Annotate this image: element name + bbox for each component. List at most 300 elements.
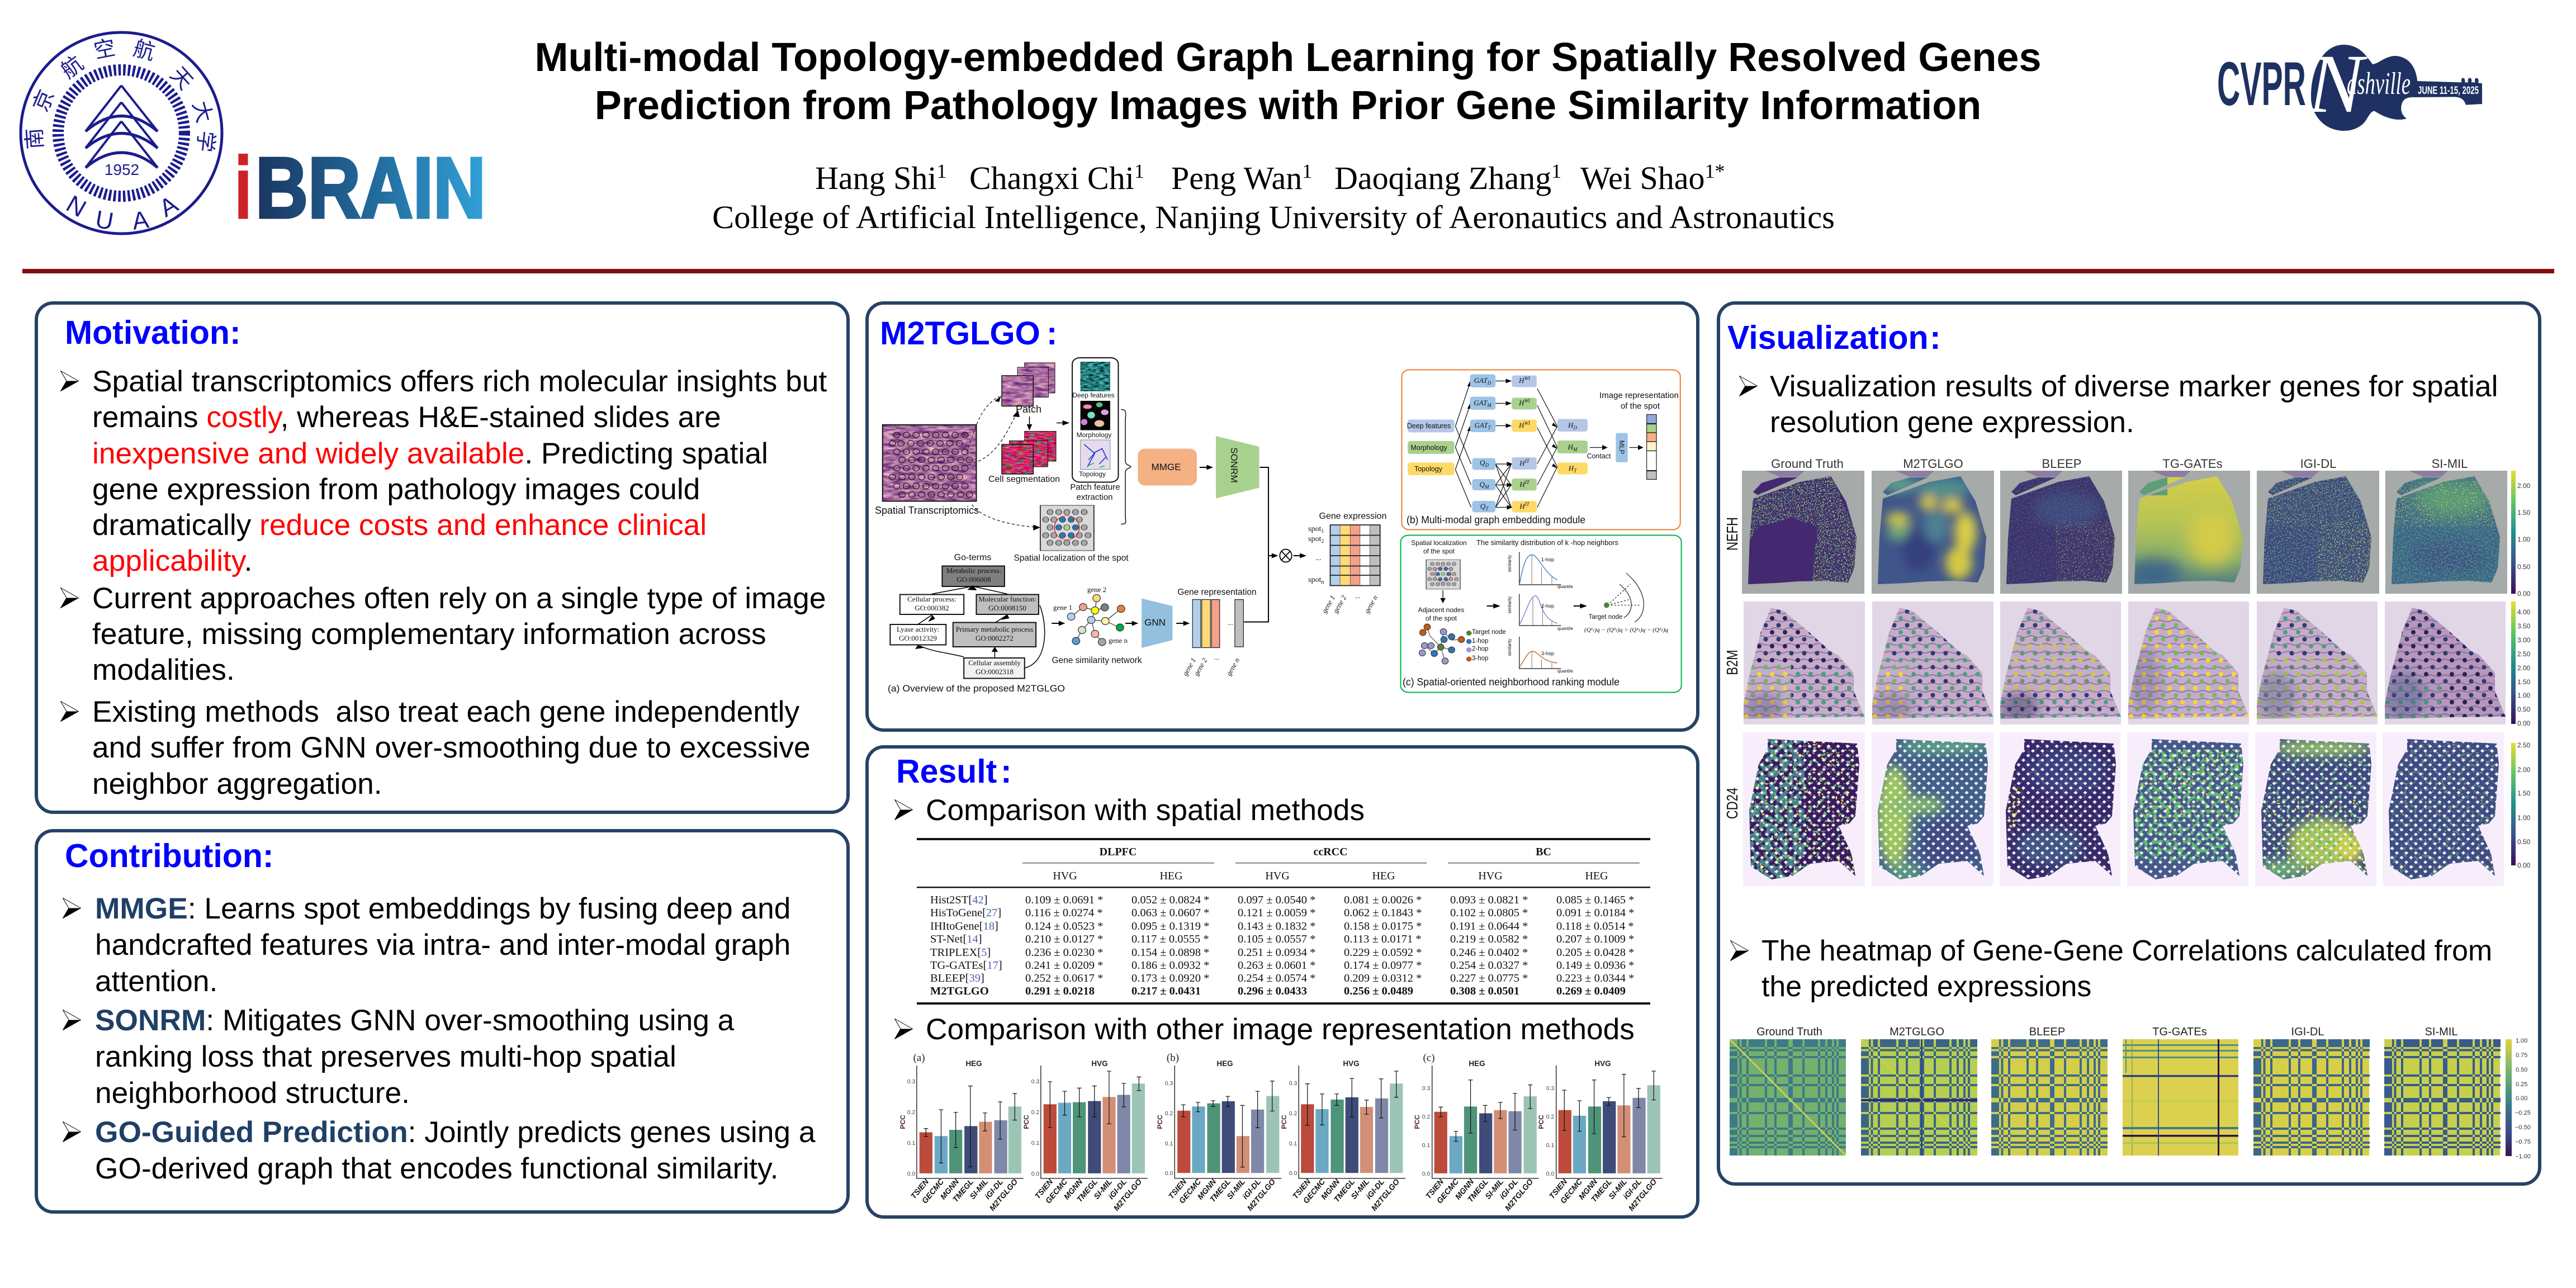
panel: M2TGLGO: spot bbox=[1308, 535, 1321, 543]
diagram labels: MLP bbox=[1618, 441, 1626, 454]
x axis method labels: SI-MIL bbox=[1349, 1177, 1371, 1201]
table: spatial method comparison: 0.308 ± 0.0501 bbox=[1450, 985, 1519, 997]
dashed arrows bbox=[964, 396, 1040, 528]
table: spatial method comparison: IHItoGene[18] bbox=[930, 920, 998, 932]
text block: Motivation bullets: neighbor aggregation. bbox=[92, 768, 382, 801]
chart titles and panel letters bbox=[965, 1059, 1611, 1068]
bar charts: PCC comparison: 0.2 bbox=[1422, 1114, 1430, 1120]
table: spatial method comparison: 0.223 ± 0.0344 * bbox=[1556, 972, 1634, 984]
x axis method labels: GECMC bbox=[1044, 1177, 1069, 1205]
panel: Motivation bbox=[36, 303, 848, 812]
panel: Contribution bbox=[36, 831, 848, 1212]
module b: boxes bbox=[1408, 375, 1628, 512]
text block: Contribution bullets: SONRM: Mitigates GNN over-smoothing using a bbox=[95, 1004, 735, 1037]
image: spatial transcriptomics slide bbox=[883, 425, 976, 501]
bar charts: PCC comparison: 0.2 bbox=[907, 1109, 915, 1116]
bar charts: PCC comparison: (a) bbox=[913, 1052, 925, 1064]
column titles: spatial maps: M2TGLGO bbox=[1903, 457, 1963, 471]
panel: M2TGLGO: Lyase activity: bbox=[897, 625, 939, 633]
diagram labels: 1-hop bbox=[1541, 557, 1554, 562]
logo: CVPR Nashville: CVPR bbox=[2217, 50, 2306, 119]
module b: image representation column bbox=[1647, 415, 1656, 480]
y axis labels: PCC bbox=[1156, 1115, 1164, 1129]
row of maps: CD24 bbox=[1743, 732, 2531, 886]
table: spatial method comparison: TG-GATEs[17] bbox=[930, 959, 1002, 972]
diagram labels: extraction bbox=[1076, 493, 1113, 502]
diagram labels: Spatial localization of the spot bbox=[1014, 553, 1129, 563]
text: heatmap description: the predicted expressions bbox=[1761, 970, 2091, 1002]
chart titles and panel letters: HVG bbox=[1343, 1059, 1360, 1068]
authors bbox=[815, 160, 1725, 196]
colorbar: CD24: 0.00 bbox=[2517, 861, 2531, 869]
map: B2M M2TGLGO bbox=[1872, 602, 1993, 724]
x axis method labels: M2TGLGO bbox=[1370, 1177, 1401, 1213]
diagram labels: (b) Multi-modal graph embedding module bbox=[1407, 514, 1585, 525]
map: NEFH SI-MIL bbox=[2385, 471, 2507, 594]
bar charts: PCC comparison: 0.2 bbox=[1546, 1114, 1554, 1120]
panel: M2TGLGO: gene 2 bbox=[1087, 585, 1106, 594]
table: spatial method comparison: 0.109 ± 0.0691 * bbox=[1025, 894, 1103, 906]
x axis method labels: TMEGL bbox=[1208, 1177, 1232, 1204]
x axis method labels: TSIEN bbox=[1167, 1177, 1188, 1201]
table: spatial method comparison: 0.091 ± 0.0184 * bbox=[1556, 907, 1634, 919]
panel: M2TGLGO: Molecular function: bbox=[978, 595, 1036, 603]
chart titles and panel letters: HVG bbox=[1091, 1059, 1108, 1068]
table: spatial method comparison: 0.186 ± 0.0932 * bbox=[1131, 959, 1209, 972]
diagram shapes bbox=[883, 358, 1682, 692]
table: spatial method comparison: 0.085 ± 0.1465 * bbox=[1556, 894, 1634, 906]
logo: NUAA university seal: 大 bbox=[188, 98, 216, 125]
panel: M2TGLGO: GAT bbox=[1474, 399, 1487, 407]
x axis method labels: MGNN bbox=[1062, 1177, 1085, 1201]
panel: M2TGLGO: GO:0012329 bbox=[899, 634, 937, 642]
bar charts: PCC comparison: (c) bbox=[1423, 1052, 1435, 1064]
x axis method labels: SI-MIL bbox=[968, 1177, 989, 1201]
table: spatial method comparison: ccRCC bbox=[1313, 846, 1348, 858]
panel: M2TGLGO: D bbox=[1484, 462, 1489, 468]
logo: NUAA university seal: 空 bbox=[92, 36, 117, 63]
x axis method labels: TSIEN bbox=[909, 1177, 931, 1201]
table: spatial method comparison: 0.113 ± 0.0171 * bbox=[1344, 933, 1422, 945]
diagram labels: Morphology bbox=[1410, 444, 1447, 452]
logo: iBRAIN: i bbox=[235, 140, 251, 236]
bar charts: PCC comparison: 0.1 bbox=[907, 1140, 915, 1147]
y axis labels: PCC bbox=[1280, 1115, 1288, 1129]
table: spatial method comparison: 0.210 ± 0.0127 * bbox=[1025, 933, 1103, 945]
logo: CVPR Nashville: N bbox=[2307, 37, 2367, 130]
text block: Motivation bullets: dramatically reduce costs and enhance clinical bbox=[92, 509, 707, 542]
table: spatial method comparison: BLEEP[39] bbox=[930, 972, 984, 984]
text block: Motivation bullets: Spatial transcriptomics offers rich molecular insights but bbox=[92, 365, 827, 398]
colorbar: CD24: 2.00 bbox=[2517, 766, 2531, 774]
column titles: spatial maps: TG-GATEs bbox=[2162, 457, 2223, 471]
diagram labels: 3-hop bbox=[1541, 651, 1554, 656]
colorbar: heatmap: −0.50 bbox=[2515, 1124, 2531, 1131]
logo: NUAA university seal: 南 bbox=[23, 127, 48, 150]
text block: Contribution bullets: GO-Guided Prediction: Jointly predicts genes using a bbox=[95, 1116, 816, 1149]
y axis labels: PCC bbox=[1413, 1115, 1421, 1129]
chart a HVG bars bbox=[1041, 1066, 1148, 1178]
panel: Result bbox=[867, 747, 1698, 1217]
x axis method labels: TSIEN bbox=[1291, 1177, 1313, 1201]
panel: M2TGLGO: gene 1 bbox=[1320, 594, 1337, 614]
heading: Motivation: Motivation: bbox=[65, 314, 241, 351]
panel: M2TGLGO: Q bbox=[1480, 502, 1485, 510]
panel: M2TGLGO: H bbox=[1568, 421, 1573, 429]
x axis method labels: SI-MIL bbox=[1483, 1177, 1505, 1201]
logo: iBRAIN: BRAIN bbox=[255, 140, 486, 236]
table: spatial method comparison: 0.149 ± 0.0936 * bbox=[1556, 959, 1634, 972]
column titles: spatial maps bbox=[1771, 457, 2468, 471]
logo: NUAA university seal: 航 bbox=[131, 37, 158, 65]
heatmap: M2TGLGO bbox=[1861, 1039, 1977, 1156]
panel: M2TGLGO: H bbox=[1519, 502, 1525, 510]
table: spatial method comparison: 0.191 ± 0.0644 * bbox=[1450, 920, 1528, 932]
panel: M2TGLGO: gene n bbox=[1362, 594, 1379, 614]
table: spatial method comparison: 0.207 ± 0.1009 * bbox=[1556, 933, 1634, 945]
x axis method labels: GECMC bbox=[920, 1177, 946, 1205]
x axis method labels: M2TGLGO bbox=[1112, 1177, 1143, 1213]
x axis method labels: TMEGL bbox=[1589, 1177, 1613, 1204]
text block: Contribution bullets: GO-derived graph that encodes functional similarity. bbox=[95, 1152, 778, 1185]
diagram labels: Patch feature bbox=[1070, 482, 1120, 492]
table: spatial method comparison: 0.173 ± 0.0920 * bbox=[1131, 972, 1209, 984]
diagram labels: 2-hop bbox=[1541, 603, 1554, 609]
table: spatial method comparison: 0.269 ± 0.0409 bbox=[1556, 985, 1626, 997]
row labels bbox=[1724, 517, 1741, 819]
table: spatial method comparison: 0.143 ± 0.1832 * bbox=[1238, 920, 1315, 932]
diagram labels: Deep features bbox=[1072, 391, 1115, 399]
table: spatial method comparison: 0.254 ± 0.0574 * bbox=[1238, 972, 1315, 984]
table: spatial method comparison: 0.124 ± 0.0523 * bbox=[1025, 920, 1103, 932]
table: spatial method comparison: 0.251 ± 0.0934 * bbox=[1238, 946, 1315, 959]
map: CD24 IGI-DL bbox=[2255, 732, 2377, 886]
table: spatial method comparison: 0.117 ± 0.0555 * bbox=[1131, 933, 1209, 945]
panel: M2TGLGO: n bbox=[1321, 579, 1324, 585]
diagram labels: similarity bbox=[1507, 555, 1512, 572]
map: B2M TG-GATEs bbox=[2128, 602, 2250, 724]
panel: M2TGLGO: GO:0008150 bbox=[988, 604, 1026, 612]
heading: Result: : bbox=[1001, 753, 1012, 790]
column titles: spatial maps: SI-MIL bbox=[2432, 457, 2468, 471]
heading: M2TGLGO: : bbox=[1046, 315, 1057, 352]
table: spatial method comparison: ST-Net[14] bbox=[930, 933, 982, 945]
colorbar: B2M: 0.50 bbox=[2517, 705, 2531, 713]
bar charts: PCC comparison: (b) bbox=[1167, 1052, 1179, 1064]
bar charts: PCC comparison: 0.3 bbox=[1422, 1085, 1430, 1092]
GO tree arrows bbox=[915, 585, 1045, 668]
bar charts: PCC comparison: 0.1 bbox=[1031, 1140, 1039, 1147]
diagram labels: Deep features bbox=[1407, 422, 1451, 430]
x axis method labels: MGNN bbox=[1453, 1177, 1476, 1201]
diagram labels: 3-hop bbox=[1472, 655, 1488, 662]
panel: M2TGLGO: H bbox=[1569, 464, 1574, 472]
x axis method labels: SI-MIL bbox=[1092, 1177, 1114, 1201]
colorbar: B2M bbox=[2511, 602, 2531, 727]
map: B2M ground truth bbox=[1744, 602, 1865, 724]
x axis method labels: M2TGLGO bbox=[988, 1177, 1019, 1213]
panel: M2TGLGO: H bbox=[1568, 443, 1573, 451]
table: spatial method comparison: 0.063 ± 0.0607 * bbox=[1131, 907, 1209, 919]
colorbar: B2M: 1.00 bbox=[2517, 692, 2531, 699]
panel: M2TGLGO: ... bbox=[1214, 653, 1220, 661]
colorbar: heatmap: −1.00 bbox=[2515, 1153, 2531, 1160]
x axis method labels: M2TGLGO bbox=[1627, 1177, 1658, 1213]
logo: NUAA university seal: A bbox=[130, 206, 151, 235]
text: heatmap description bbox=[1731, 934, 2492, 1002]
colorbar: NEFH: 1.50 bbox=[2517, 509, 2531, 517]
colorbar: CD24 bbox=[2511, 741, 2531, 869]
chart c HEG bars bbox=[1432, 1066, 1539, 1178]
x axis method labels: TMEGL bbox=[951, 1177, 975, 1204]
diagram labels: similarity bbox=[1507, 638, 1512, 656]
table: spatial method comparison: HisToGene[27] bbox=[930, 907, 1001, 919]
x axis method labels: iGI-DL bbox=[983, 1177, 1005, 1201]
x axis method labels bbox=[909, 1177, 1658, 1213]
panel: M2TGLGO: H bbox=[1519, 399, 1524, 407]
block: MMGE bbox=[1138, 448, 1197, 485]
multiply symbol bbox=[1280, 549, 1292, 562]
column titles: heatmaps: Ground Truth bbox=[1756, 1026, 1822, 1038]
text block: Motivation bullets: Current approaches often rely on a single type of image bbox=[92, 582, 826, 615]
text block: Motivation bullets: modalities. bbox=[92, 654, 235, 686]
panel: M2TGLGO: H bbox=[1519, 421, 1524, 429]
table: spatial method comparison: HVG bbox=[1265, 870, 1290, 882]
heading: Visualization: : bbox=[1930, 319, 1941, 356]
bar charts: PCC comparison: 0.0 bbox=[1289, 1170, 1297, 1177]
y axis labels: PCC bbox=[1537, 1115, 1545, 1129]
diagram labels: quantile bbox=[1557, 669, 1574, 674]
row labels: B2M bbox=[1724, 650, 1741, 675]
bar charts: PCC comparison: 0.0 bbox=[1031, 1171, 1039, 1177]
image stack: cell segmentation bbox=[1002, 432, 1056, 474]
panel: M2TGLGO: GAT bbox=[1474, 376, 1488, 385]
diagram labels: Target node bbox=[1589, 614, 1622, 621]
row labels: CD24 bbox=[1724, 788, 1741, 819]
map: B2M IGI-DL bbox=[2257, 602, 2378, 724]
diagram labels: Patch bbox=[1016, 404, 1041, 415]
heading: Visualization: Visualization bbox=[1727, 319, 1929, 356]
panel: M2TGLGO: gene n bbox=[1224, 656, 1241, 677]
panel: M2TGLGO: WI bbox=[1524, 376, 1531, 381]
diagram labels: Morphology bbox=[1077, 431, 1111, 439]
table: spatial method comparison: 0.081 ± 0.0026 * bbox=[1344, 894, 1422, 906]
logo: NUAA university seal: U bbox=[93, 206, 116, 235]
colorbar: B2M: 1.50 bbox=[2517, 678, 2531, 686]
authors: Hang Shi bbox=[815, 160, 937, 196]
logo: CVPR Nashville: ashville bbox=[2347, 67, 2411, 101]
diagram labels: Topology bbox=[1079, 470, 1106, 478]
subheading: comparison with image representation methods: Comparison with other image representation methods bbox=[926, 1013, 1635, 1046]
map: B2M BLEEP bbox=[2000, 602, 2122, 724]
text block: Motivation bullets: Existing methods also treat each gene independently bbox=[92, 695, 800, 728]
colorbar: B2M: 3.50 bbox=[2517, 622, 2531, 630]
authors: 1 bbox=[937, 160, 947, 182]
logo: NUAA university seal bbox=[21, 32, 222, 235]
panel: M2TGLGO: D bbox=[1573, 425, 1577, 430]
colorbar: NEFH bbox=[2511, 471, 2531, 598]
text block: Motivation bullets: and suffer from GNN over-smoothing due to excessive bbox=[92, 731, 811, 764]
x axis method labels: MGNN bbox=[1577, 1177, 1599, 1201]
panel: M2TGLGO: gene 1 bbox=[1053, 603, 1072, 612]
panel: M2TGLGO: M bbox=[1486, 402, 1491, 408]
table: spatial method comparison: M2TGLGO bbox=[930, 985, 989, 997]
text block: Motivation bullets: inexpensive and widely available. Predicting spatial bbox=[92, 437, 768, 470]
heatmap: IGI-DL bbox=[2253, 1039, 2370, 1156]
table: spatial method comparison: 0.121 ± 0.0059 * bbox=[1238, 907, 1315, 919]
bar charts: PCC comparison: 0.3 bbox=[1546, 1085, 1554, 1092]
diagram labels: GNN bbox=[1144, 617, 1166, 628]
authors: Peng Wan bbox=[1171, 160, 1302, 196]
map: NEFH IGI-DL bbox=[2257, 471, 2379, 594]
text block: Contribution bullets: neighborhood structure. bbox=[95, 1077, 410, 1110]
map: CD24 M2TGLGO bbox=[1872, 732, 1993, 886]
table: spatial method comparison: 0.116 ± 0.0274 * bbox=[1025, 907, 1103, 919]
diagram labels: (c) Spatial-oriented neighborhood ranking module bbox=[1403, 676, 1620, 688]
text block: Contribution bullets: MMGE: Learns spot embeddings by fusing deep and bbox=[95, 892, 790, 925]
map: NEFH M2TGLGO bbox=[1872, 471, 1994, 594]
logo: NUAA university seal: N bbox=[61, 190, 91, 222]
x axis method labels: SI-MIL bbox=[1607, 1177, 1628, 1201]
chart titles and panel letters: HEG bbox=[965, 1059, 982, 1068]
bar charts: PCC comparison: 0.1 bbox=[1546, 1142, 1554, 1149]
diagram labels: Cell segmentation bbox=[988, 475, 1060, 484]
x axis method labels: TMEGL bbox=[1332, 1177, 1356, 1204]
map: NEFH BLEEP bbox=[2000, 471, 2122, 594]
chart titles and panel letters: HVG bbox=[1594, 1059, 1611, 1068]
bracket bbox=[1121, 409, 1131, 524]
colorbar: heatmap: −0.75 bbox=[2515, 1139, 2531, 1145]
diagram labels: Gene similarity network bbox=[1052, 656, 1142, 665]
module c: spot grid bbox=[1426, 560, 1460, 589]
panel: M2TGLGO: Cellular assembly bbox=[968, 659, 1021, 667]
diagram labels: Gene representation bbox=[1177, 588, 1257, 597]
logo: CVPR Nashville bbox=[2217, 37, 2482, 131]
colorbar: CD24: 1.00 bbox=[2517, 814, 2531, 822]
x axis method labels: M2TGLGO bbox=[1503, 1177, 1535, 1213]
panel: M2TGLGO: spot bbox=[1308, 576, 1321, 584]
authors: 1* bbox=[1704, 160, 1725, 182]
table: spatial method comparison: 0.296 ± 0.0433 bbox=[1238, 985, 1307, 997]
affiliation: College of Artificial Intelligence, Nanjing University of Aeronautics and Astronautics bbox=[712, 199, 1835, 235]
table: spatial method comparison: 0.217 ± 0.0431 bbox=[1131, 985, 1201, 997]
colorbar: heatmap: 1.00 bbox=[2516, 1038, 2527, 1044]
logo: CVPR Nashville: JUNE 11-15, 2025 bbox=[2418, 85, 2479, 97]
colorbar: B2M: 2.50 bbox=[2517, 650, 2531, 658]
block: GNN bbox=[1142, 598, 1172, 648]
column titles: heatmaps: M2TGLGO bbox=[1890, 1026, 1944, 1038]
x axis method labels: iGI-DL bbox=[1364, 1177, 1386, 1201]
panel: M2TGLGO: IT bbox=[1524, 501, 1530, 507]
authors: 1 bbox=[1551, 160, 1561, 182]
colorbar: B2M: 3.00 bbox=[2517, 636, 2531, 644]
map: CD24 TG-GATEs bbox=[2127, 732, 2249, 886]
diagram labels: Spatial Transcriptomics bbox=[875, 505, 979, 516]
colorbar: CD24: 1.50 bbox=[2517, 789, 2531, 797]
authors: Changxi Chi bbox=[969, 160, 1134, 196]
panel: M2TGLGO: (Q¹ₜ)q − (Q³ₜ)q > (Q²ₜ)q − (Q³ₜ)q bbox=[1584, 627, 1668, 633]
x axis method labels: M2TGLGO bbox=[1246, 1177, 1277, 1213]
table: spatial method comparison: 0.102 ± 0.0805 * bbox=[1450, 907, 1528, 919]
table: spatial method comparison: 0.252 ± 0.0617 * bbox=[1025, 972, 1103, 984]
x axis method labels: TSIEN bbox=[1424, 1177, 1446, 1201]
table: spatial method comparison: 0.158 ± 0.0175 * bbox=[1344, 920, 1422, 932]
panel: M2TGLGO: gene n bbox=[1109, 636, 1128, 645]
x axis method labels: SI-MIL bbox=[1225, 1177, 1247, 1201]
text: marker gene description bbox=[1740, 370, 2498, 439]
column titles: heatmaps: IGI-DL bbox=[2291, 1026, 2324, 1038]
bar charts: PCC comparison: 0.3 bbox=[1031, 1078, 1039, 1085]
panel: M2TGLGO: Cellular process: bbox=[907, 595, 956, 603]
diagram labels: Gene expression bbox=[1319, 512, 1386, 521]
table: spatial method comparison: 0.174 ± 0.0977 * bbox=[1344, 959, 1422, 972]
heatmap: SI-MIL bbox=[2384, 1039, 2501, 1156]
table: spatial method comparison: 0.219 ± 0.0582 * bbox=[1450, 933, 1528, 945]
panel: M2TGLGO: IT bbox=[1524, 458, 1530, 464]
authors: Wei Shao bbox=[1580, 160, 1704, 196]
green module frame bbox=[1401, 536, 1682, 692]
text block: Contribution bullets bbox=[63, 892, 816, 1185]
table: spatial method comparison: 0.097 ± 0.0540 * bbox=[1238, 894, 1315, 906]
panel: M2TGLGO: H bbox=[1519, 480, 1525, 489]
text block: Contribution bullets: ranking loss that preserves multi-hop spatial bbox=[95, 1040, 676, 1073]
colorbar: B2M: 2.00 bbox=[2517, 664, 2531, 672]
diagram labels: of the spot bbox=[1423, 547, 1455, 555]
module c: ranking arcs bbox=[1604, 573, 1644, 622]
x axis method labels: TSIEN bbox=[1033, 1177, 1055, 1201]
panel: M2TGLGO: gene 2 bbox=[1331, 594, 1348, 614]
panel: M2TGLGO: 2 bbox=[1321, 538, 1324, 544]
diagram labels: of the spot bbox=[1621, 401, 1660, 411]
panel: M2TGLGO: 1 bbox=[1321, 528, 1324, 534]
logo: NUAA university seal: 1952 bbox=[105, 161, 139, 178]
heatmap: ground truth bbox=[1730, 1039, 1846, 1156]
text: marker gene description: Visualization results of diverse marker genes for spatial bbox=[1770, 370, 2498, 403]
panel: M2TGLGO: T bbox=[1574, 468, 1577, 473]
diagram labels: quantile bbox=[1557, 626, 1574, 631]
y axis labels bbox=[899, 1115, 1545, 1129]
table: spatial method comparison: 0.209 ± 0.0312 * bbox=[1344, 972, 1422, 984]
text: marker gene description: resolution gene expression. bbox=[1770, 406, 2134, 439]
colorbar: heatmap: 0.25 bbox=[2516, 1081, 2527, 1088]
table: spatial method comparison: HVG bbox=[1053, 870, 1077, 882]
diagram labels: Image representation bbox=[1599, 391, 1679, 400]
bar charts: PCC comparison: 0.0 bbox=[1546, 1171, 1554, 1177]
module c: arrows bbox=[1487, 604, 1587, 608]
x axis method labels: iGI-DL bbox=[1621, 1177, 1643, 1201]
logo: NUAA university seal: 航 bbox=[57, 52, 88, 83]
colorbar: heatmap: 0.50 bbox=[2516, 1067, 2527, 1073]
table: spatial method comparison: 0.205 ± 0.0428 * bbox=[1556, 946, 1634, 959]
diagram labels: Topology bbox=[1414, 465, 1443, 473]
colorbar: NEFH: 0.50 bbox=[2517, 563, 2531, 571]
heatmap: TG-GATEs bbox=[2123, 1039, 2238, 1156]
map: NEFH ground truth bbox=[1742, 471, 1864, 594]
diagram labels: quantile bbox=[1557, 584, 1574, 589]
column titles: heatmaps bbox=[1756, 1026, 2457, 1038]
diagram labels: Contact bbox=[1587, 452, 1611, 460]
bar charts: PCC comparison bbox=[899, 1052, 1663, 1213]
gene expression matrix bbox=[1330, 525, 1380, 586]
colorbar: heatmap bbox=[2506, 1038, 2531, 1160]
panel: M2TGLGO: T bbox=[1488, 425, 1491, 430]
panel: M2TGLGO: T bbox=[1485, 506, 1489, 512]
bar charts: PCC comparison: 0.0 bbox=[907, 1171, 915, 1177]
column titles: spatial maps: Ground Truth bbox=[1771, 457, 1844, 471]
table: spatial method comparison: DLPFC bbox=[1100, 846, 1137, 858]
subheading: comparison with spatial methods: Comparison with spatial methods bbox=[926, 794, 1365, 827]
x axis method labels: TSIEN bbox=[1547, 1177, 1569, 1201]
